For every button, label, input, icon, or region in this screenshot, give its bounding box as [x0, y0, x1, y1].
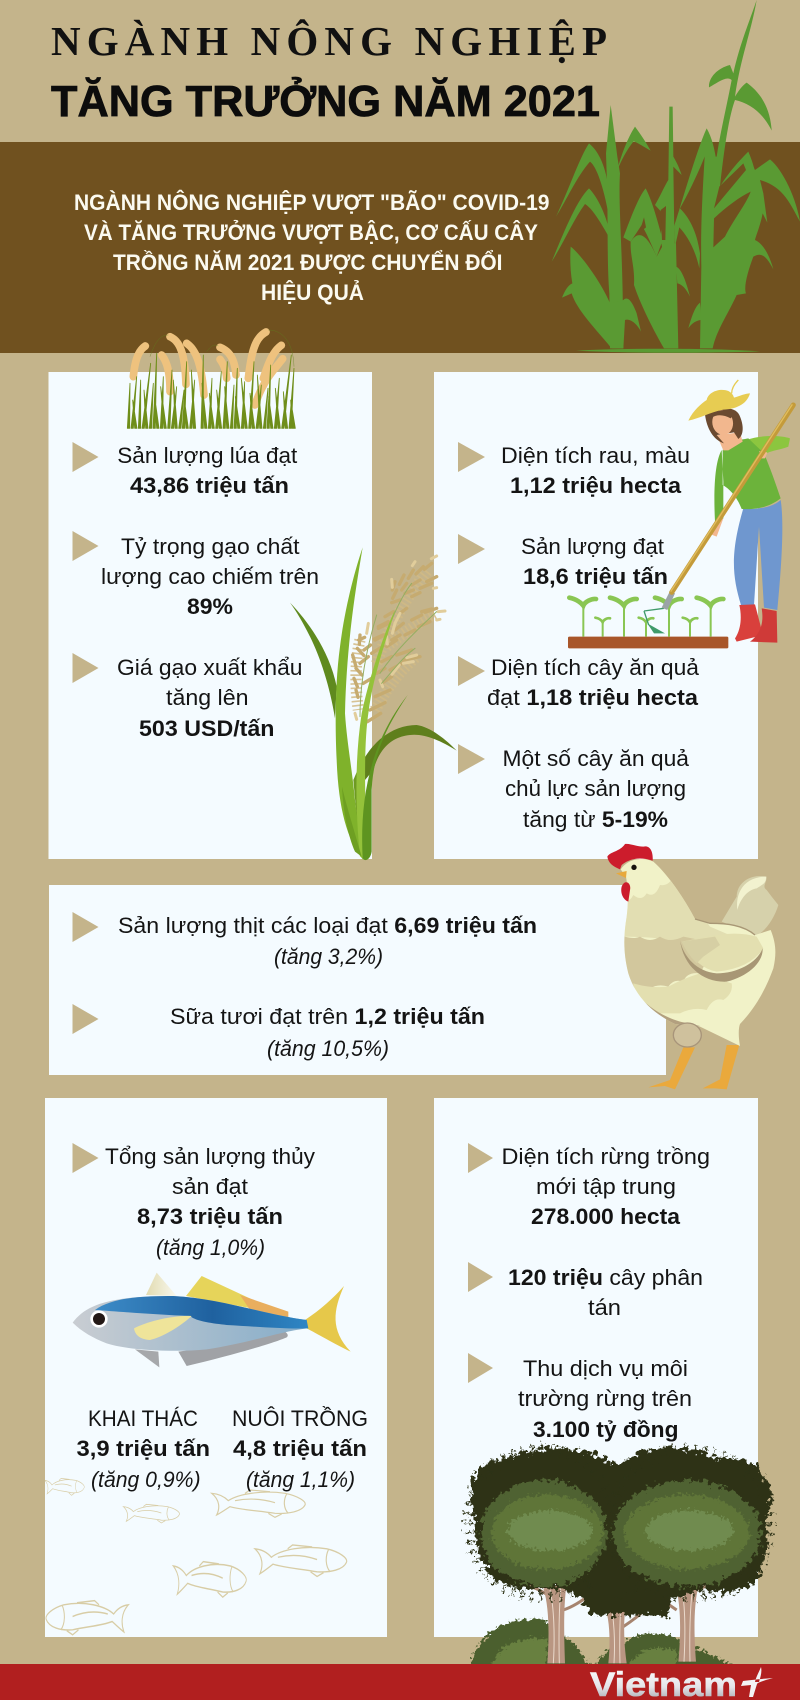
body — [620, 859, 776, 1046]
legs — [648, 1045, 739, 1089]
beak — [616, 871, 627, 878]
text: fishery: NUÔI TRỒNG — [232, 1406, 368, 1431]
text: fishery: 8,73 triệu tấn — [137, 1204, 283, 1229]
text: meat and milk — [118, 913, 537, 1061]
text: meat and milk: (tăng 3,2%) — [274, 944, 383, 969]
hair — [705, 408, 743, 443]
text: vegetables and fruit: 1,12 triệu hecta — [510, 473, 682, 498]
text: fishery: 4,8 triệu tấn — [233, 1436, 367, 1461]
jeans — [734, 500, 782, 610]
icon: corn plants — [552, 0, 800, 353]
bullet arrows — [72, 442, 493, 1383]
text: fishery: (tăng 1,1%) — [246, 1467, 355, 1492]
text: forestry: tán — [588, 1295, 621, 1320]
text: vegetables and fruit: tăng từ 5-19% — [523, 807, 668, 832]
wing — [682, 934, 763, 972]
text: rice: Tỷ trọng gạo chất — [121, 534, 300, 559]
text: fishery: KHAI THÁC — [88, 1406, 198, 1431]
text: fishery: 3,9 triệu tấn — [76, 1436, 210, 1461]
hat — [688, 390, 750, 421]
subtitle text: HIỆU QUẢ — [261, 280, 364, 305]
subtitle text: TRỒNG NĂM 2021 ĐƯỢC CHUYỂN ĐỔI — [113, 250, 502, 275]
text: forestry: 120 triệu cây phân — [508, 1265, 703, 1290]
text: rice: 503 USD/tấn — [139, 716, 274, 741]
tail — [722, 876, 778, 936]
title — [51, 18, 607, 126]
text: meat and milk: (tăng 10,5%) — [267, 1036, 389, 1061]
panel: forestry — [434, 1098, 758, 1637]
text: rice: Sản lượng lúa đạt — [117, 443, 297, 468]
icon: big fish — [73, 1273, 351, 1367]
hoe — [644, 591, 675, 633]
text: vegetables and fruit: chủ lực sản lượng — [505, 776, 686, 801]
dark canopy — [468, 1447, 771, 1617]
thigh — [673, 1023, 701, 1047]
icon: hen — [607, 844, 783, 1089]
text: fishery: Tổng sản lượng thủy — [105, 1144, 315, 1169]
text: vegetables and fruit: Một số cây ăn quả — [502, 746, 690, 771]
text: rice: 43,86 triệu tấn — [130, 473, 289, 498]
text: rice: Giá gạo xuất khẩu — [117, 655, 302, 680]
text: forestry: 3.100 tỷ đồng — [533, 1417, 678, 1442]
brown banner — [0, 142, 800, 353]
text: vegetables and fruit — [487, 443, 700, 832]
seedlings — [569, 598, 723, 637]
text: rice — [101, 443, 319, 741]
subtitle text: VÀ TĂNG TRƯỞNG VƯỢT BẬC, CƠ CẤU CÂY — [84, 220, 538, 245]
icon: trees — [468, 1447, 771, 1670]
wattle and comb — [621, 882, 630, 902]
text: rice: 89% — [187, 594, 233, 619]
text: forestry: Diện tích rừng trồng — [502, 1144, 710, 1169]
title line 1: NGÀNH NÔNG NGHIỆP — [51, 18, 607, 64]
text: meat and milk: Sữa tươi đạt trên 1,2 triệu tấn — [170, 1004, 485, 1029]
icon: small fish outlines — [45, 1478, 347, 1635]
text: forestry: trường rừng trên — [518, 1386, 692, 1411]
shirt — [747, 436, 790, 457]
subtitle text: NGÀNH NÔNG NGHIỆP VƯỢT "BÃO" COVID-19 — [74, 190, 550, 215]
text: meat and milk: Sản lượng thịt các loại đạt 6,69 triệu tấn — [118, 913, 537, 938]
text: forestry: Thu dịch vụ môi — [523, 1356, 688, 1381]
icon: rice field — [127, 330, 295, 428]
panel: rice — [48, 372, 372, 859]
icon: farmer with hoe — [568, 380, 793, 648]
text: fishery: (tăng 0,9%) — [91, 1467, 200, 1492]
footer bar — [0, 1664, 800, 1700]
icon: rice plant — [290, 547, 457, 860]
text: vegetables and fruit: Diện tích cây ăn quả — [491, 655, 700, 680]
bushes — [470, 1616, 732, 1664]
hoe handle — [672, 405, 793, 592]
text: vegetables and fruit: 18,6 triệu tấn — [523, 564, 668, 589]
text: vegetables and fruit: đạt 1,18 triệu hecta — [487, 685, 699, 710]
text: rice: tăng lên — [166, 685, 248, 710]
panel: fishery — [45, 1098, 387, 1637]
text: vegetables and fruit: Sản lượng đạt — [521, 534, 664, 559]
text: fishery: (tăng 1,0%) — [156, 1235, 265, 1260]
text: fishery: sản đạt — [172, 1174, 248, 1199]
text: forestry: mới tập trung — [536, 1174, 676, 1199]
text: fishery — [76, 1144, 368, 1492]
corn plant gaps — [639, 163, 751, 247]
mid canopy — [481, 1480, 761, 1587]
subtitle text — [74, 190, 550, 305]
text: forestry: 278.000 hecta — [531, 1204, 681, 1229]
text: forestry — [502, 1144, 710, 1442]
trunks and branches — [510, 1584, 706, 1664]
boots — [735, 604, 762, 642]
panel: vegetables and fruit — [434, 372, 758, 859]
skin — [708, 432, 767, 537]
title line 2: TĂNG TRƯỞNG NĂM 2021 — [51, 75, 600, 126]
soil — [568, 637, 728, 648]
text: rice: lượng cao chiếm trên — [101, 564, 319, 589]
panel: meat and milk — [49, 885, 666, 1075]
text: vegetables and fruit: Diện tích rau, màu — [501, 443, 690, 468]
face — [710, 409, 735, 437]
eye — [631, 865, 637, 870]
